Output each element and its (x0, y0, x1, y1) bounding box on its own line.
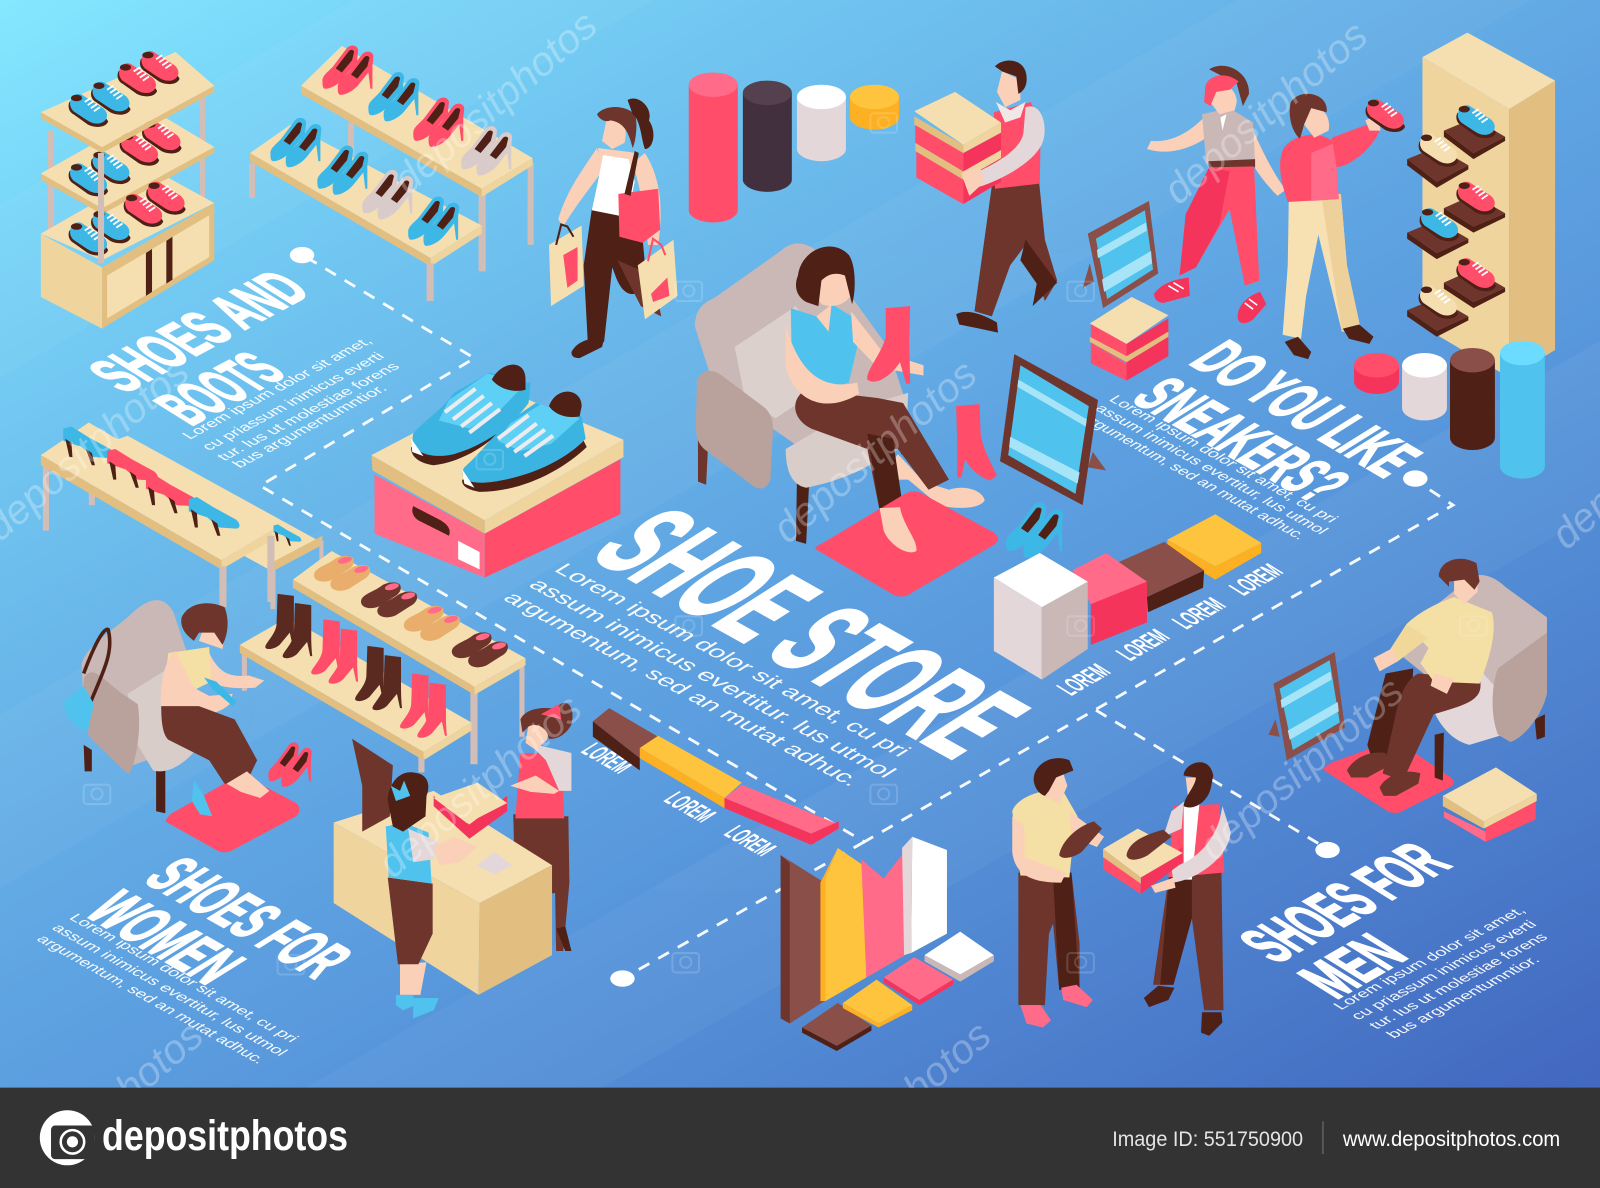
cylinders chart top (689, 72, 899, 222)
heading: shoes and boots: SHOES AND (73, 261, 326, 402)
watermark depositphotos text: depositphotos (1154, 12, 1376, 213)
footer website: www.depositphotos.com (1342, 1127, 1560, 1151)
main title paragraph (498, 560, 917, 790)
men's area shoebox (1443, 767, 1537, 842)
customer at counter (386, 772, 478, 1018)
small mirror (1083, 201, 1158, 308)
text: shoes and boots paragraph (179, 335, 404, 470)
double heel table (249, 45, 534, 301)
sneaker-table with side view heels (41, 422, 323, 609)
counter block (334, 791, 552, 995)
tall display wall (1407, 33, 1555, 378)
logo wordmark: depositphotos (102, 1112, 348, 1160)
heading: shoes for women: SHOES FOR (129, 847, 369, 988)
text: women paragraph: argumentum, sed an mutat adhuc. (32, 933, 269, 1066)
text: shoes and boots paragraph: bus argumentumntior. (229, 382, 391, 470)
watermark depositphotos text: depositphotos (1190, 668, 1412, 869)
footer bar (0, 1088, 1600, 1188)
cylinders chart right (1354, 341, 1545, 479)
staff woman behind counter (510, 703, 573, 951)
icon: camera logo (40, 1110, 95, 1165)
watermark depositphotos text: depositphotos (369, 685, 590, 886)
text: men paragraph (1330, 905, 1552, 1041)
small box stack (1090, 297, 1168, 381)
box stack carried (914, 92, 1001, 204)
main title paragraph: assum inimicus evertitur. lus utmol (523, 575, 902, 781)
text: men paragraph: cu priassum inimicus everti (1347, 918, 1541, 1023)
text: men paragraph: Lorem ipsum dolor sit amet, (1330, 905, 1530, 1012)
text: women paragraph: Lorem ipsum dolor sit amet, cu pri (65, 911, 302, 1045)
seated woman with armchair left (63, 600, 312, 852)
big mirror (1000, 354, 1106, 505)
text: sneakers paragraph (1076, 393, 1342, 542)
footer logo (40, 1110, 348, 1165)
heading: shoes for women: WOMEN (70, 881, 261, 994)
watermark depositphotos text: depositphotos (384, 1, 606, 203)
footer divider (1322, 1121, 1323, 1154)
labels: lorem axis labels upper (1050, 560, 1289, 699)
labels: lorem axis labels lower: LOREM (657, 788, 723, 826)
sneaker shelf tower with cabinet (41, 51, 214, 329)
boots and shoes stand (240, 551, 526, 772)
shopper woman with bags (549, 98, 678, 358)
text: shoes and boots paragraph: cu priassum inimicus everti (198, 350, 389, 453)
labels: lorem axis labels upper: LOREM (1050, 660, 1117, 699)
woman holding sneaker (1280, 94, 1405, 359)
arrow columns chart (781, 837, 994, 1051)
red mat (165, 776, 299, 852)
watermark depositphotos text: depositphotos (763, 350, 985, 552)
text: shoes and boots paragraph: tur. lus ut molestiae forens (213, 360, 404, 463)
isometric block bars chart (994, 514, 1261, 680)
seated man in armchair (1322, 559, 1547, 813)
tray (477, 852, 512, 874)
store worker carrying boxes (914, 60, 1057, 333)
blue heels on floor (1006, 503, 1063, 558)
boot on floor (956, 404, 997, 481)
heading: shoes and boots (73, 261, 326, 434)
heading: shoes for women (70, 847, 369, 994)
text: shoes and boots paragraph: Lorem ipsum dolor sit amet, (179, 335, 376, 442)
monitor (352, 739, 393, 832)
labels: lorem axis labels upper: LOREM (1109, 625, 1176, 665)
man trying shoe left (1012, 758, 1104, 1028)
big sneakers on box (371, 365, 623, 578)
heading: shoes and boots: BOOTS (140, 343, 301, 434)
armchair with seated woman (695, 243, 997, 552)
seated woman figure (786, 247, 985, 552)
footer image id: Image ID: 551750900 (1112, 1127, 1303, 1151)
labels: lorem axis labels upper: LOREM (1222, 560, 1289, 599)
main title paragraph: Lorem ipsum dolor sit amet, cu pri (549, 560, 917, 760)
watermark camera icons (84, 113, 1487, 974)
main title paragraph: argumentum, sed an mutat adhuc. (498, 588, 867, 790)
woman in red trousers (1147, 66, 1286, 323)
heading: do you like sneakers (1117, 331, 1436, 512)
labels: lorem axis labels upper: LOREM (1165, 593, 1232, 633)
text: women paragraph (32, 911, 302, 1066)
salesman with beard holding box (1103, 762, 1231, 1036)
text: men paragraph: tur. lus ut molestiae forens (1365, 931, 1552, 1032)
text: men paragraph: bus argumentumntior. (1383, 954, 1544, 1041)
text: women paragraph: assum inimicus evertitur, lus utmol (48, 922, 291, 1059)
men's area mirror (1268, 652, 1345, 760)
dashed flow connector lines (260, 257, 1453, 978)
text: sneakers paragraph: argumentum, sed an mutat adhuc. (1076, 411, 1310, 542)
text: sneakers paragraph: assum inimicus evertitur, lus utmol (1090, 402, 1332, 537)
labels: lorem axis labels lower: LOREM (575, 739, 640, 777)
main title: SHOE STORE (563, 490, 1058, 776)
labels: lorem axis labels lower (575, 739, 783, 860)
foot on mat (880, 507, 917, 552)
heading: shoes for men (1223, 833, 1466, 1008)
connector end dots (290, 247, 1428, 987)
heading: do you like sneakers: SNEAKERS? (1117, 368, 1365, 512)
red floor mat (815, 491, 998, 597)
box on counter (434, 783, 507, 839)
heading: shoes for men: MEN (1282, 924, 1423, 1008)
armchair (695, 243, 908, 544)
lower bar chart (593, 708, 839, 845)
labels: lorem axis labels lower: LOREM (718, 821, 783, 860)
text: sneakers paragraph: Lorem ipsum dolor sit amet, cu pri (1105, 393, 1342, 525)
counter with cashier and customer (334, 703, 573, 1018)
